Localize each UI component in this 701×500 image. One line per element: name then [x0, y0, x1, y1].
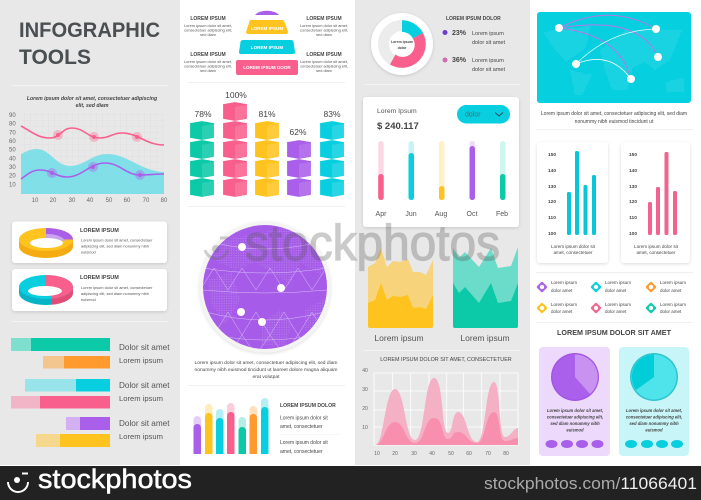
line chart with area: 20 [9, 174, 16, 180]
line chart with area: 60 [124, 198, 131, 204]
donut legend [442, 16, 505, 73]
line chart with area: 60 [9, 139, 16, 145]
bar chart text [280, 403, 340, 455]
legend: Lorem ipsum [551, 302, 577, 307]
cube bar chart: 83% [323, 109, 341, 119]
panel: pink cyan donut card: Lorem ipsum dolor sit amet, consectetuer [81, 285, 153, 290]
donut legend: Lorem ipsum [472, 31, 504, 37]
donut legend: LOREM IPSUM DOLOR [446, 16, 501, 22]
legend: dolor amet [605, 309, 627, 314]
pink area chart: 50 [448, 451, 454, 457]
pyramid labels: LOREM IPSUM [306, 52, 342, 58]
green area chart [453, 247, 518, 343]
title: TOOLS [19, 46, 91, 69]
line chart with area: 30 [9, 165, 16, 171]
title: INFOGRAPHIC [19, 19, 160, 42]
legend: Lorem ipsum [605, 280, 631, 285]
panel: pink cyan donut card [12, 269, 167, 311]
line chart with area: 70 [143, 198, 150, 204]
panel: cyan pie card: Lorem ipsum dolor sit amet, [626, 408, 682, 413]
pyramid labels: sed diam [316, 32, 332, 37]
panel: monthly bars card: Apr [376, 211, 387, 218]
panel: monthly bars card: Oct [467, 211, 477, 218]
line chart with area: 70 [9, 130, 16, 136]
line chart with area: 50 [106, 198, 113, 204]
legend: dolor amet [551, 288, 573, 293]
line chart with area: 50 [9, 148, 16, 154]
footer bar [0, 464, 701, 500]
title [19, 19, 160, 69]
icon: pink cyan 3d donut [19, 275, 73, 305]
panel: purple pie card: euismod [566, 428, 584, 432]
legend: dolor amet [660, 309, 682, 314]
pink area chart: 40 [362, 368, 368, 374]
intro text: Lorem ipsum dolor sit amet, consectetuer adipiscing [27, 96, 158, 102]
donut chart [371, 13, 433, 75]
intro text [27, 96, 158, 109]
pink area chart: 60 [466, 451, 472, 457]
intro text: elit, sed diam [76, 103, 109, 109]
panel: pink cyan donut card: euismod [81, 297, 96, 302]
pyramid: LOREM IPSUM [251, 45, 283, 50]
pink area chart: 20 [362, 406, 368, 412]
panel: cyan column chart: 110 [548, 215, 556, 221]
pink area chart: 10 [362, 425, 368, 431]
donut legend: 36% [452, 57, 467, 64]
legend: Lorem ipsum [605, 302, 631, 307]
map caption [541, 111, 687, 125]
pink area chart: 30 [411, 451, 417, 457]
donut chart: dolor [398, 46, 407, 50]
panel: pink cyan donut card: adipiscing elit, sed diam nonummy nibh [81, 291, 149, 296]
horizontal bars: Dolor sit amet [119, 381, 170, 390]
legend: dolor amet [605, 288, 627, 293]
panel: monthly bars card [363, 97, 519, 227]
panel: pink column chart: amet, consectetuer [636, 250, 676, 255]
panel: cyan column chart: 140 [548, 168, 556, 174]
panel: monthly bars card: Feb [496, 211, 508, 218]
panel: purple pie card: Lorem ipsum dolor sit amet, [547, 408, 603, 413]
pyramid labels: consectetuer adipiscing elit, [184, 64, 232, 68]
bar chart text: Lorem ipsum dolor sit [280, 440, 328, 446]
pyramid labels: sed diam [200, 68, 216, 73]
rounded bar chart [194, 398, 268, 454]
pink area chart: 30 [362, 387, 368, 393]
line chart with area: 10 [9, 182, 16, 188]
pyramid labels: consectetuer adipiscing elit, [184, 28, 232, 32]
pink area chart: 80 [503, 451, 509, 457]
panel: pink column chart: 120 [629, 199, 637, 205]
pyramid labels: LOREM IPSUM [190, 16, 226, 22]
bar chart text: amet, consectetuer [280, 424, 323, 430]
globe caption [194, 360, 338, 380]
horizontal bars: Lorem ipsum [119, 356, 163, 365]
watermark: stockphotos [245, 215, 500, 271]
line chart with area: 80 [161, 198, 168, 204]
cube bar chart: 100% [225, 90, 247, 100]
line chart with area: 20 [50, 198, 57, 204]
panel: pink column chart: 140 [629, 168, 637, 174]
donut legend: 23% [452, 30, 467, 37]
horizontal bars: Dolor sit amet [119, 419, 170, 428]
legend: dolor amet [551, 309, 573, 314]
dropdown: dolor [465, 112, 481, 118]
horizontal bars [11, 338, 170, 447]
pyramid labels: Lorem ipsum dolor sit amet, [184, 23, 232, 28]
pink area chart: 70 [485, 451, 491, 457]
panel: pink column chart: 110 [629, 215, 637, 221]
panel: cyan column chart: 100 [548, 231, 556, 237]
pyramid labels: LOREM IPSUM [190, 52, 226, 58]
footer bar: stockphotos.com/ 11066401 [484, 475, 697, 493]
panel: pink column chart: 130 [629, 184, 637, 190]
yellow area chart: Lorem ipsum [374, 333, 424, 343]
panel: cyan pie card: sed diam nonummy nibh [629, 421, 679, 426]
pink area chart: 20 [392, 451, 398, 457]
panel: purple pie card [539, 347, 610, 456]
legend: Lorem ipsum [660, 302, 686, 307]
section heading: LOREM IPSUM DOLOR SIT AMET [557, 328, 672, 337]
line chart with area: 30 [69, 198, 76, 204]
panel: yellow donut card [12, 222, 167, 263]
donut legend: dolor sit amet [472, 40, 505, 46]
panel: monthly bars card: Lorem Ipsum [377, 108, 417, 115]
panel: purple pie card: sed diam nonummy nibh [550, 421, 600, 426]
pink area chart: LOREM IPSUM DOLOR SIT AMET, CONSECTETUER [380, 357, 512, 363]
map caption: Lorem ipsum dolor sit amet, consectetuer adipiscing elit, sed diam [541, 111, 687, 117]
panel: pink column chart: 150 [629, 152, 637, 158]
panel: cyan column chart: 150 [548, 152, 556, 158]
line chart with area: 90 [9, 113, 16, 119]
bar chart text: Lorem ipsum dolor sit [280, 416, 328, 422]
globe [200, 222, 330, 355]
icon: yellow 3d donut [19, 228, 73, 258]
line chart with area [9, 113, 168, 204]
panel: cyan pie card: euismod [645, 428, 663, 432]
panel: yellow donut card: adipiscing elit, sed diam nonummy nibh [81, 244, 149, 248]
panel: monthly bars card: Aug [435, 211, 447, 218]
panel: monthly bars card: $ 240.117 [377, 121, 419, 132]
yellow area chart [368, 248, 433, 343]
panel: yellow donut card: Lorem ipsum dolor sit amet, consectetuer [81, 238, 153, 242]
dropdown [457, 105, 510, 124]
legend: Lorem ipsum [660, 280, 686, 285]
panel: yellow donut card: euismod [81, 250, 96, 254]
panel: monthly bars card: Jun [405, 211, 417, 218]
donut legend: Lorem ipsum [472, 58, 504, 64]
cube bar chart [190, 90, 344, 196]
cube bar chart: 78% [194, 109, 212, 119]
donut chart: Lorem ipsum [391, 40, 413, 44]
line chart with area: 40 [9, 157, 16, 163]
bar chart text: amet, consectetuer [280, 449, 323, 455]
pyramid labels: Lorem ipsum dolor sit amet, [184, 59, 232, 64]
panel: cyan column chart: Lorem ipsum dolor sit [551, 244, 596, 249]
panel: cyan column chart [537, 142, 608, 263]
cube bar chart: 81% [258, 109, 276, 119]
horizontal bars: Lorem ipsum [119, 432, 163, 441]
line chart with area: 40 [87, 198, 94, 204]
horizontal bars: Dolor sit amet [119, 343, 170, 352]
pyramid [236, 11, 298, 75]
pyramid labels: sed diam [200, 32, 216, 37]
panel: purple pie card: consectetuer adipiscing elit, [547, 414, 603, 420]
pyramid labels: sed diam [316, 68, 332, 73]
footer bar: stockphotos [38, 464, 192, 494]
icon: logo [8, 474, 28, 492]
panel: cyan column chart: 120 [548, 199, 556, 205]
pink area chart: 40 [429, 451, 435, 457]
pink area chart: 10 [374, 451, 380, 457]
map caption: nonummy nibh euismod tincidunt ut [575, 119, 654, 125]
pyramid labels: consectetuer adipiscing elit, [300, 64, 348, 68]
panel: pink column chart: Lorem ipsum dolor sit [634, 244, 679, 249]
globe caption: Lorem ipsum dolor sit amet, consectetuer adipiscing elit, sed diam [195, 360, 337, 366]
line chart with area: 10 [32, 198, 39, 204]
cube bar chart: 62% [289, 127, 307, 137]
panel: cyan pie card: consectetuer adipiscing elit, [626, 414, 682, 420]
pink area chart [362, 357, 518, 457]
panel: cyan pie card [619, 347, 689, 456]
globe caption: erat volutpat [253, 374, 280, 380]
panel: pink cyan donut card: LOREM IPSUM [80, 275, 119, 281]
panel: cyan column chart: 130 [548, 184, 556, 190]
pyramid labels: Lorem ipsum dolor sit amet, [300, 23, 348, 28]
panel: cyan column chart: amet, consectetuer [553, 250, 593, 255]
green area chart: Lorem ipsum [460, 333, 510, 343]
bar chart text: LOREM IPSUM DOLOR [280, 403, 336, 409]
legend: dolor amet [660, 288, 682, 293]
pyramid labels: LOREM IPSUM [306, 16, 342, 22]
horizontal bars: Lorem ipsum [119, 394, 163, 403]
legend [538, 280, 686, 314]
pyramid: LOREM IPSUM [251, 26, 283, 31]
pyramid labels: consectetuer adipiscing elit, [300, 28, 348, 32]
world map [537, 12, 691, 103]
globe caption: nonummy nibh euismod tincidunt ut laoreet dolore magna aliquam [194, 367, 338, 373]
pyramid labels [184, 16, 348, 73]
pyramid labels: Lorem ipsum dolor sit amet, [300, 59, 348, 64]
donut legend: dolor sit amet [472, 67, 505, 73]
panel: yellow donut card: LOREM IPSUM [80, 228, 119, 234]
pyramid: LOREM IPSUM DOOR [243, 65, 291, 70]
line chart with area: 80 [9, 122, 16, 128]
legend: Lorem ipsum [551, 280, 577, 285]
panel: pink column chart: 100 [629, 231, 637, 237]
panel: pink column chart [621, 142, 690, 263]
